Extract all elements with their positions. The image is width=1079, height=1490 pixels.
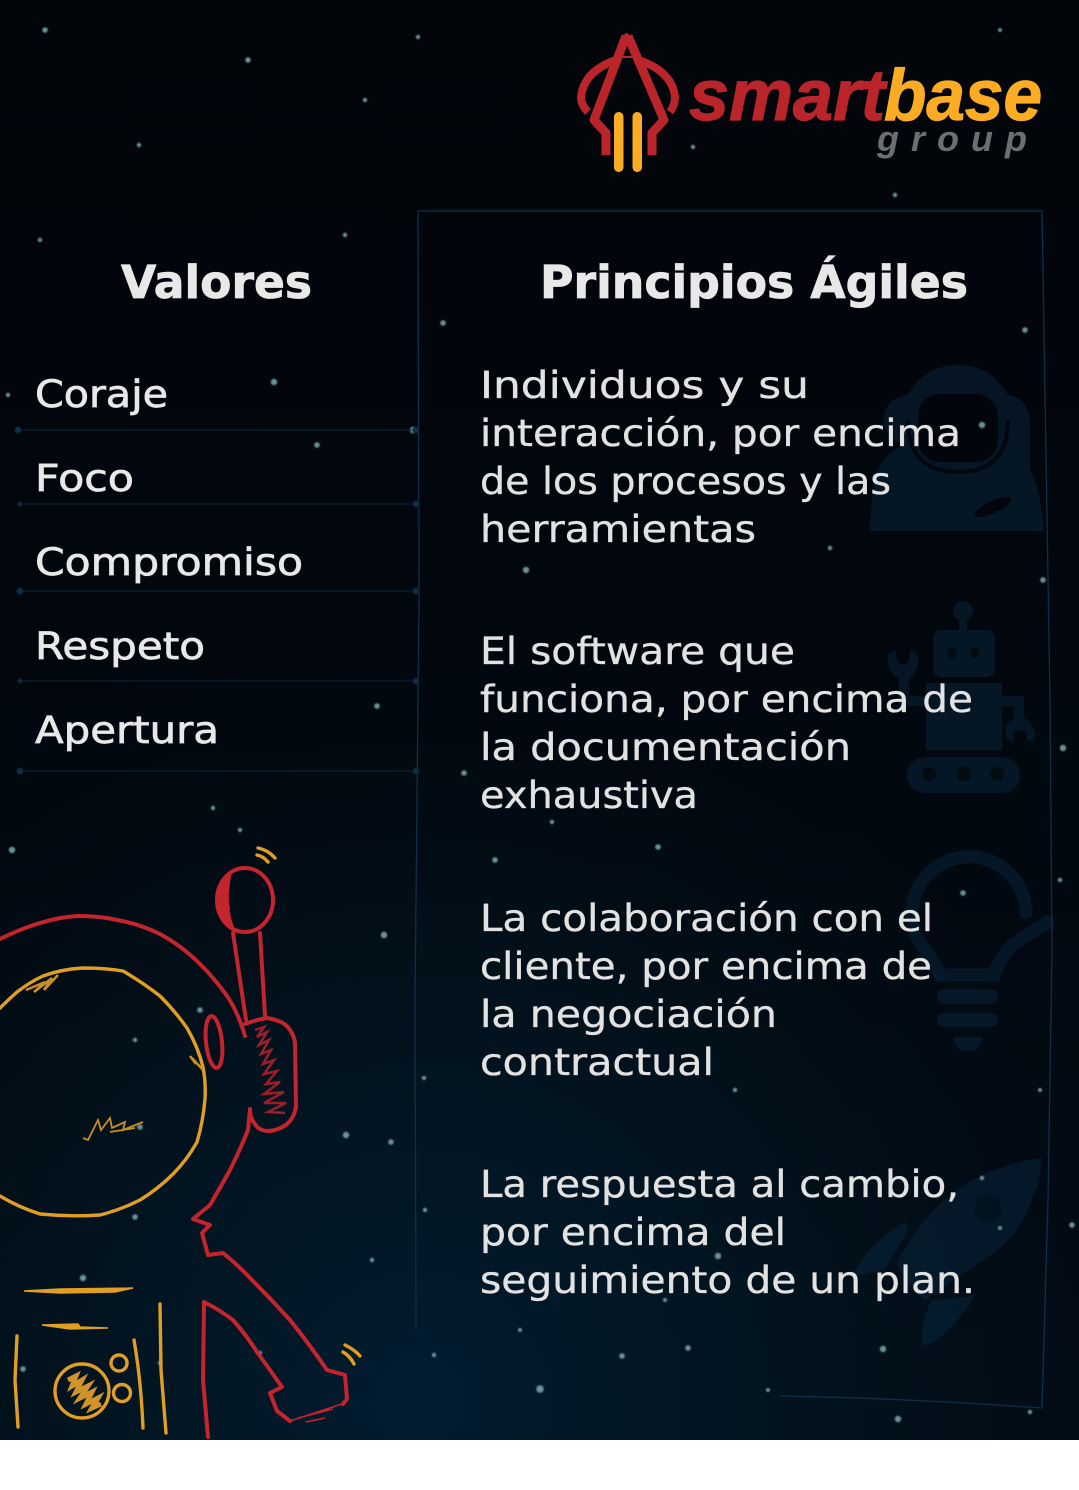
foot hatching bbox=[290, 1403, 345, 1422]
logo icon: rocket bbox=[581, 33, 675, 172]
heading: Principios Ágiles: Principios Ágiles bbox=[540, 256, 968, 309]
text block: principle 1 bbox=[480, 364, 961, 551]
text block: principle 3: cliente, por encima de bbox=[480, 945, 932, 988]
body and raised leg bbox=[193, 1109, 347, 1404]
watermark icon: rocket bbox=[853, 1158, 1042, 1346]
illustration: hand-drawn astronaut bbox=[0, 848, 360, 1437]
list: valores bbox=[15, 373, 419, 774]
value: Compromiso: Compromiso bbox=[35, 541, 303, 584]
watermark icon: astronaut bbox=[869, 365, 1044, 531]
value: Respeto: Respeto bbox=[35, 625, 205, 668]
logo wordmark: group: group bbox=[876, 118, 1027, 159]
logo: smartbase group bbox=[581, 33, 1042, 172]
visor scribbles bbox=[26, 975, 203, 1070]
lower leg bbox=[203, 1302, 290, 1437]
text block: principle 1: de los procesos y las bbox=[480, 460, 891, 503]
control panel bbox=[15, 1288, 166, 1433]
visor bbox=[0, 968, 205, 1216]
ear hatching bbox=[255, 1027, 286, 1113]
panel outline: principios bbox=[415, 211, 1052, 1408]
text block: principle 4 bbox=[480, 1163, 975, 1302]
watermark icon: robot bbox=[888, 601, 1035, 793]
text block: principle 1: interacción, por encima bbox=[480, 412, 961, 455]
text block: principle 3 bbox=[480, 897, 933, 1084]
value: Foco: Foco bbox=[35, 457, 134, 500]
value: Apertura: Apertura bbox=[35, 709, 219, 752]
text block: principle 4: La respuesta al cambio, bbox=[480, 1163, 959, 1206]
text block: principle 3: la negociación bbox=[480, 993, 777, 1036]
text block: principle 2 bbox=[480, 630, 973, 817]
text block: principle 3: contractual bbox=[480, 1041, 714, 1084]
text block: principle 2: El software que bbox=[480, 630, 795, 673]
antenna stick bbox=[233, 933, 265, 1020]
watermark icon: light bulb bbox=[912, 857, 1048, 1051]
value: Coraje: Coraje bbox=[35, 373, 168, 416]
antenna ball bbox=[217, 868, 273, 932]
side ellipse bbox=[203, 1015, 225, 1069]
ear piece bbox=[245, 1018, 296, 1131]
logo wordmark: smartbase: smart bbox=[689, 56, 888, 136]
text block: principle 2: funciona, por encima de bbox=[480, 678, 973, 721]
text block: principle 1: herramientas bbox=[480, 508, 756, 551]
text block: principle 4: seguimiento de un plan. bbox=[480, 1259, 975, 1302]
heading: Valores: Valores bbox=[121, 256, 312, 309]
text block: principle 1: Individuos y su bbox=[480, 364, 809, 407]
text block: principle 2: exhaustiva bbox=[480, 774, 698, 817]
logo wordmark: base: base bbox=[884, 56, 1042, 136]
text block: principle 4: por encima del bbox=[480, 1211, 786, 1254]
bottom white strip bbox=[0, 1440, 1079, 1490]
helmet outline bbox=[0, 916, 245, 1036]
text block: principle 2: la documentación bbox=[480, 726, 851, 769]
spark marks bbox=[257, 848, 360, 1364]
text block: principle 3: La colaboración con el bbox=[480, 897, 933, 940]
